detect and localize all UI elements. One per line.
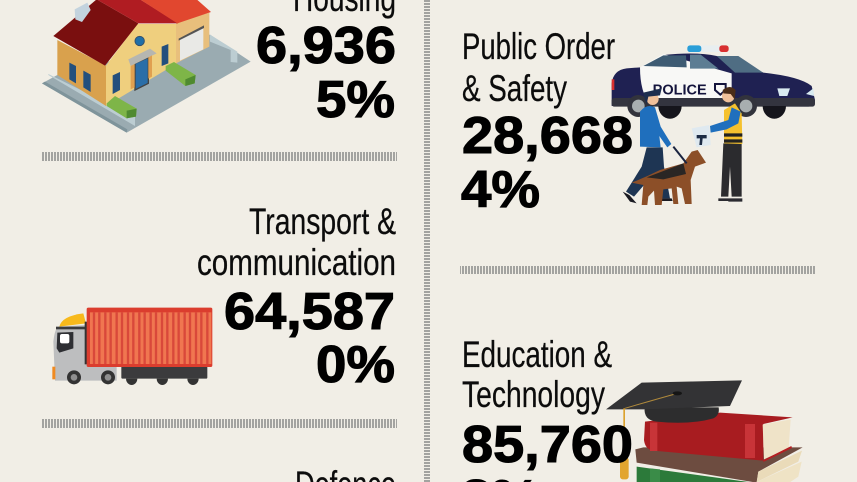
icon: house bbox=[42, 0, 251, 133]
label: Education & Technology: Technology bbox=[462, 374, 605, 415]
label: Education & Technology: Education & bbox=[462, 334, 612, 375]
value: 5%: 5% bbox=[316, 71, 395, 129]
label: Transport & communication bbox=[197, 201, 396, 283]
label: Transport & communication: communication bbox=[197, 242, 396, 283]
icon: police car, officers and dog bbox=[612, 45, 815, 205]
icon: container truck bbox=[52, 308, 212, 385]
officer with vest bbox=[721, 143, 742, 197]
value: 4%: 4% bbox=[461, 161, 540, 219]
panel: housing bbox=[42, 0, 396, 133]
icon: police car, officers and dog: POLICE bbox=[653, 83, 707, 99]
value: 28,668: 28,668 bbox=[462, 107, 633, 165]
label: Education & Technology bbox=[462, 334, 612, 415]
label: Transport & communication: Transport & bbox=[249, 201, 396, 242]
label: Public Order & Safety: & Safety bbox=[462, 68, 567, 109]
value: 0%: 0% bbox=[316, 336, 395, 394]
panel: transport and communication bbox=[52, 201, 396, 394]
value: 64,587: 64,587 bbox=[224, 283, 395, 341]
icon: graduation cap and books bbox=[606, 380, 803, 482]
label: Public Order & Safety: Public Order bbox=[462, 26, 615, 67]
panel: public order and safety bbox=[461, 26, 815, 219]
dog bbox=[632, 150, 706, 205]
panel: education and technology bbox=[461, 334, 803, 482]
value: 85,760: 85,760 bbox=[462, 416, 633, 474]
label: Public Order & Safety bbox=[462, 26, 615, 109]
officer with dog bbox=[626, 147, 670, 198]
value: 6,936: 6,936 bbox=[256, 17, 396, 75]
